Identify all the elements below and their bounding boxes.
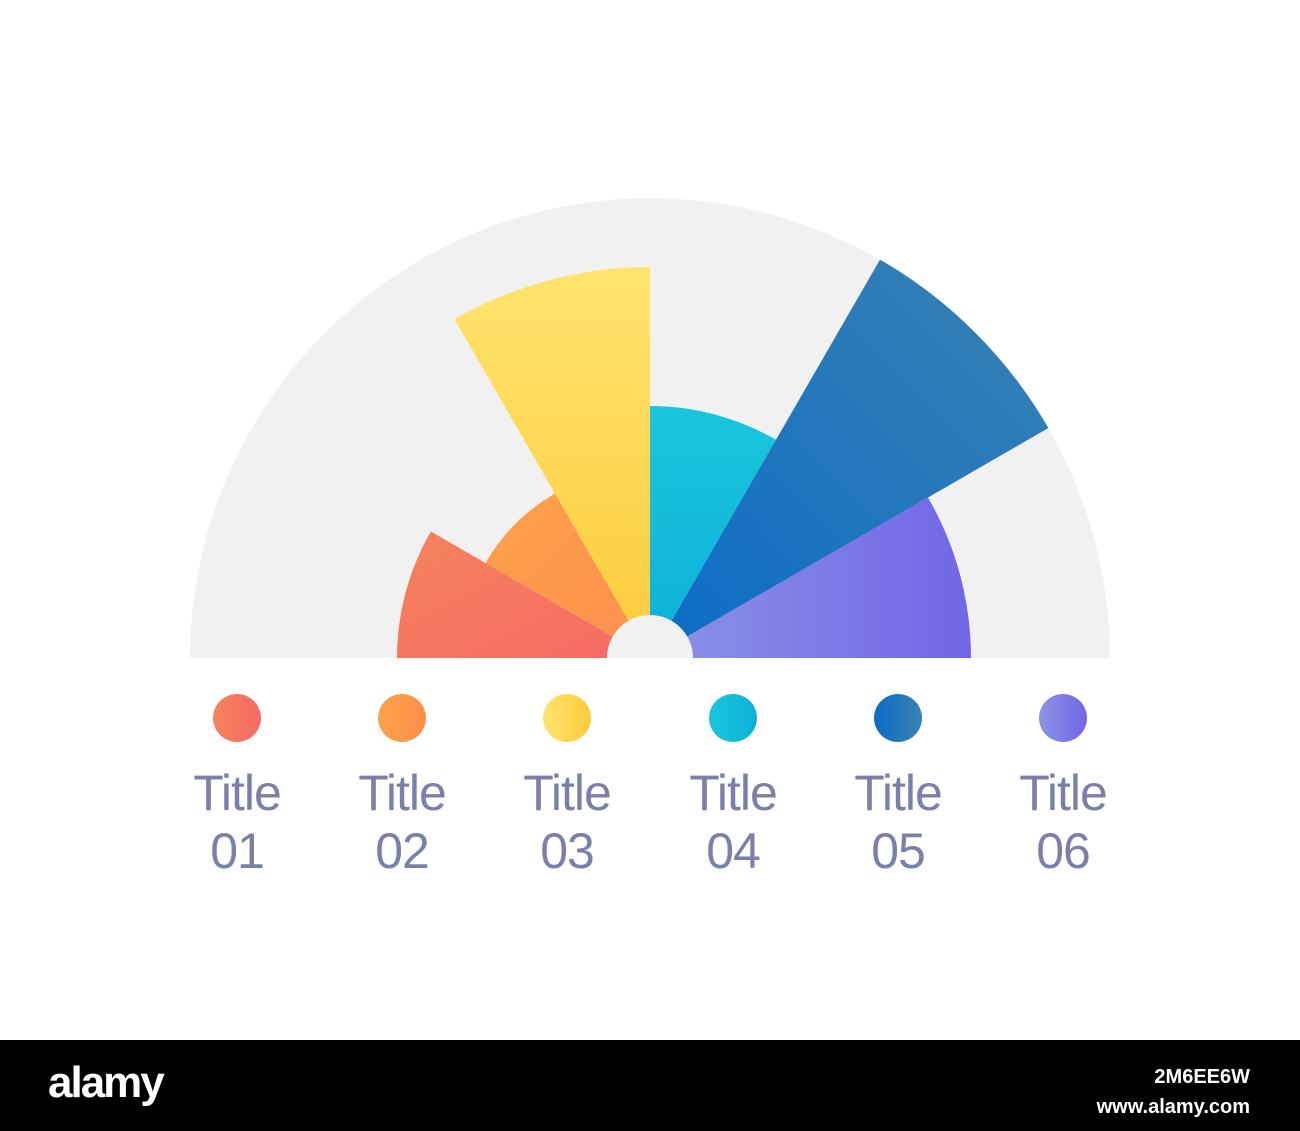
legend 03 bbox=[523, 694, 611, 879]
footer bar bbox=[0, 1040, 1300, 1131]
chart: radial semicircle bbox=[190, 198, 1110, 658]
sector 01 bbox=[397, 532, 650, 658]
legend 04 bbox=[689, 694, 777, 879]
sector 05 bbox=[650, 260, 1048, 658]
legend 01: 01 bbox=[210, 823, 264, 879]
legend 01: Title bbox=[193, 765, 281, 821]
center hub bbox=[607, 615, 693, 658]
legend 05: 05 bbox=[871, 823, 925, 879]
legend 06 bbox=[1019, 694, 1107, 879]
legend 04: 04 bbox=[706, 823, 760, 879]
footer logo: alamy bbox=[48, 1058, 163, 1107]
sector 03 bbox=[454, 267, 650, 658]
legend 01 bbox=[193, 694, 281, 879]
footer id: www.alamy.com bbox=[1097, 1096, 1250, 1118]
legend 06: 06 bbox=[1036, 823, 1090, 879]
sector 06 bbox=[650, 498, 971, 658]
footer id: 2M6EE6W bbox=[1154, 1066, 1250, 1088]
legend 04: Title bbox=[689, 765, 777, 821]
legend 05 bbox=[854, 694, 942, 879]
legend 02 bbox=[358, 694, 446, 879]
sector 02 bbox=[486, 494, 650, 658]
legend 05: Title bbox=[854, 765, 942, 821]
legend 03: 03 bbox=[540, 823, 594, 879]
legend 02: Title bbox=[358, 765, 446, 821]
legend 06: Title bbox=[1019, 765, 1107, 821]
background semicircle bbox=[190, 198, 1110, 658]
legend 02: 02 bbox=[375, 823, 429, 879]
legend 03: Title bbox=[523, 765, 611, 821]
sector 04 bbox=[650, 406, 776, 658]
footer id bbox=[1096, 1066, 1250, 1118]
